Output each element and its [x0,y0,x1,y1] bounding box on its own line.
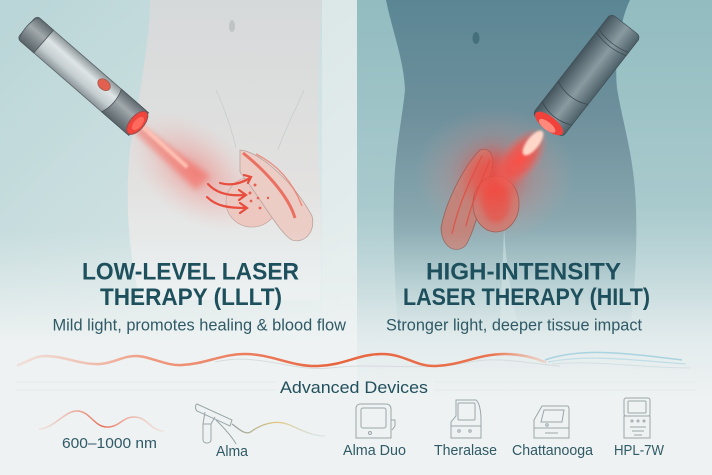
label: Alma: Alma [216,444,249,460]
subtitle: low-level: Mild light, promotes healing & blood flow [52,316,346,334]
device: Theralase [434,400,497,459]
label: Chattanooga: Chattanooga [512,443,594,459]
label: Alma Duo: Alma Duo [343,443,406,459]
label: wavelength: 600–1000 nm [62,435,157,452]
device: Chattanooga [512,406,594,459]
dots: tissue particles [248,184,269,209]
bottom band [0,345,712,475]
treatment area glow, right [415,107,575,249]
heading: high-intensity laser therapy: HIGH-INTENSITY [426,258,621,286]
icon: low-level laser pen [17,15,152,139]
heading: advanced devices [15,378,697,397]
icon: Chattanooga unit [534,406,569,438]
wave: Alma spectrum [232,422,325,436]
heading: low-level laser therapy: LOW-LEVEL LASER [82,258,299,286]
icon: Alma handpiece [196,404,236,444]
device: Alma [196,404,325,460]
device: HPL-7W [614,398,664,459]
icon: wavelength wave [39,411,164,431]
torso figure, dark [386,0,636,330]
panel: high-intensity laser therapy [357,0,712,345]
laser beam, left [134,124,210,190]
heading: low-level laser therapy [0,230,357,345]
wavelength item [39,411,164,452]
icon: HPL-7W unit [624,398,650,438]
label: HPL-7W: HPL-7W [614,443,664,459]
icon: high-intensity laser pen [530,13,641,141]
heading: high-intensity laser therapy: LASER THERAPY (HILT) [403,284,650,311]
heading: advanced devices: Advanced Devices [280,378,428,397]
treatment area glow, left [105,88,313,256]
label: Theralase: Theralase [434,443,497,459]
icon: Alma Duo console [356,404,395,438]
heading: high-intensity laser therapy [357,230,712,345]
subtitle: high-intensity: Stronger light, deeper tissue impact [386,316,642,334]
arrows: blood flow [207,175,251,213]
wave: light spectrum divider [18,352,690,369]
icon: Theralase unit [451,400,481,438]
heading: low-level laser therapy: THERAPY (LLLT) [100,284,282,311]
laser beam, right [484,118,558,198]
panel: low-level laser therapy [0,0,357,345]
device: Alma Duo [343,404,406,459]
torso figure, light [128,0,357,345]
